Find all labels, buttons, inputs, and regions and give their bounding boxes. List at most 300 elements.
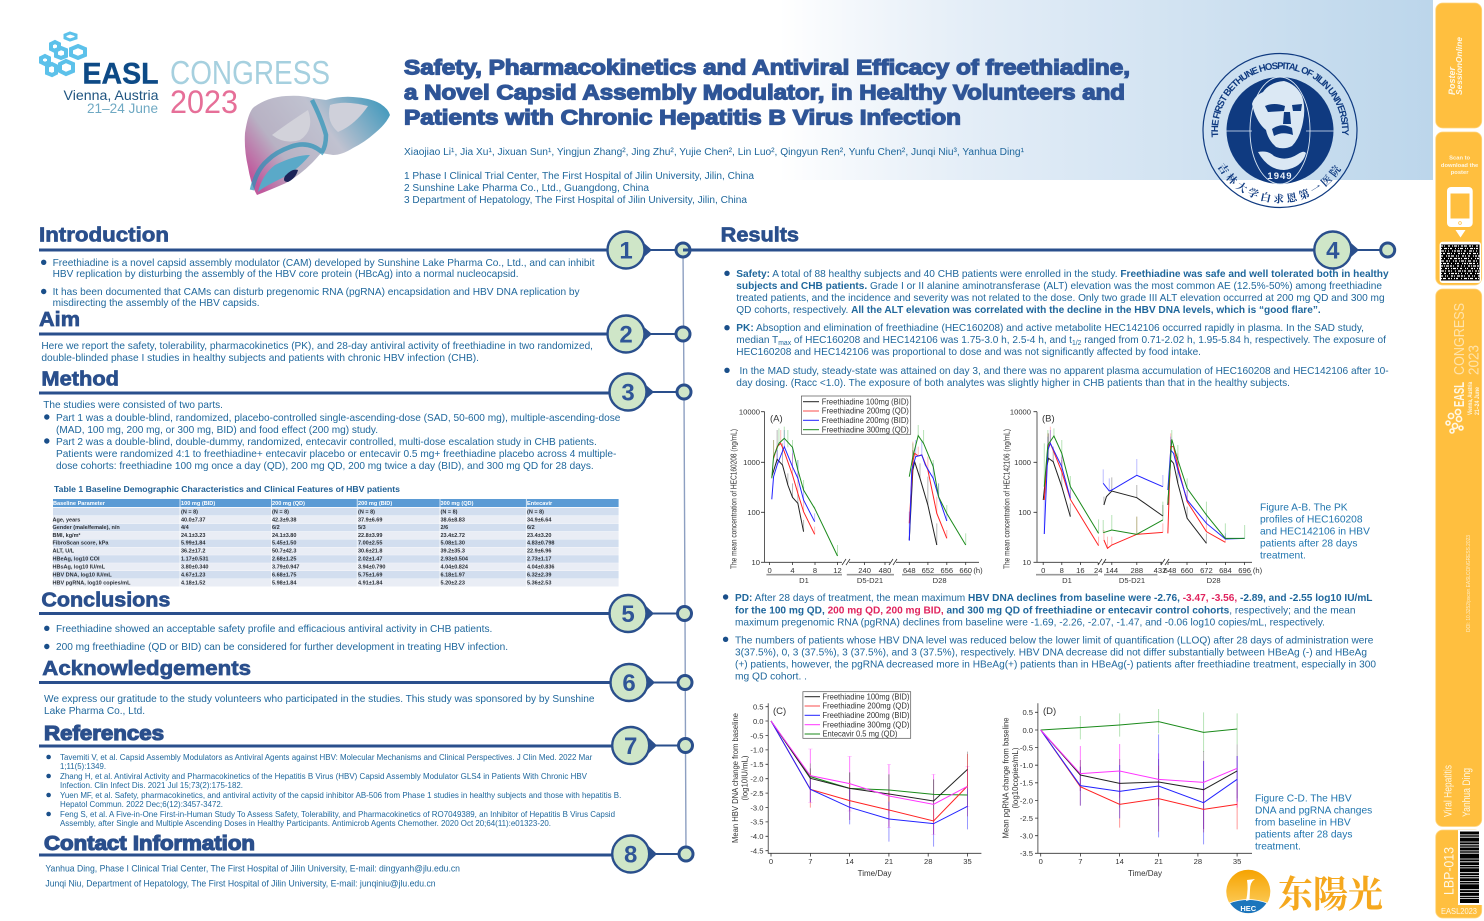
axis labels D: 0.0 <box>1022 726 1033 735</box>
axis labels C: -4.0 <box>750 832 764 841</box>
axis labels C: 21 <box>885 857 893 866</box>
table rows: 6.68±1.75 <box>272 573 296 579</box>
axis labels B: (h) <box>1253 566 1263 575</box>
chart C: HBV DNA change <box>731 692 981 878</box>
table title: Table 1 Baseline Demographic Characteristics and Clinical Features of HBV patients <box>54 485 401 494</box>
table rows: 22.8±3.99 <box>358 533 382 539</box>
axis labels D: -2.0 <box>1020 796 1033 805</box>
text: pharmacokinetics: HEC160208 and HEC142106 was proportional to dose and was not significantly affected by food intake. <box>736 347 1201 358</box>
badge 4: 4 <box>1326 238 1340 264</box>
text: acknowledgements <box>44 694 595 717</box>
axis labels A: 4 <box>790 566 795 575</box>
table rows: 6.18±1.97 <box>440 573 465 579</box>
axis labels A: D1 <box>799 576 809 585</box>
badge 3: 3 <box>621 380 635 406</box>
heading: introduction: Introduction <box>39 225 169 247</box>
table rows: 5.98±1.84 <box>272 581 297 587</box>
table rows: 2.73±1.17 <box>527 557 551 563</box>
table rows: 42.3±9.38 <box>272 517 296 523</box>
text: safety: treated patients, and the incidence and severity was not related to the dose. Only two grade III ALT elevation occurred at 200 mg QD and 300 mg <box>736 293 1385 304</box>
table rows: Gender (male/female), n/n <box>52 525 120 531</box>
text: LLOQ: mg QD cohort. . <box>735 672 807 682</box>
badge 6 <box>610 664 692 701</box>
axis labels B: 432 <box>1154 566 1166 575</box>
side logo: EASL Congress: EASL <box>1452 382 1468 407</box>
table header: 300 mg (QD) <box>440 501 474 507</box>
QR code <box>1440 242 1481 283</box>
scan instruction: Scan to <box>1449 156 1471 162</box>
text: conclusions: Freethiadine showed an acceptable safety profile and efficacious antiviral activity in CHB patients. <box>56 624 492 635</box>
badge 7: 7 <box>624 733 637 760</box>
CONGRESS wordmark: CONGRESS <box>170 54 330 91</box>
chart A: HEC160208 concentration <box>730 396 983 585</box>
table rows: 5.99±1.84 <box>181 541 206 547</box>
icon: phone <box>1447 187 1473 227</box>
axis labels C: -2.5 <box>750 789 764 798</box>
legend A: Freethiadine 200mg (BID) <box>822 416 909 425</box>
text: pharmacokinetics: of HEC160208 and HEC142106 was 1.75-3.0 h, 2.5-4 h, and t <box>791 335 1072 346</box>
axis labels A: 8 <box>813 566 817 575</box>
table rows: 6/2 <box>527 525 535 531</box>
table rows: 4.18±1.52 <box>181 581 205 587</box>
axis labels D: 0 <box>1039 857 1043 866</box>
barcode <box>1458 830 1484 905</box>
axis labels B: 648 <box>1164 566 1176 575</box>
table header <box>53 501 553 507</box>
legend A: Freethiadine 300mg (QD) <box>822 425 909 434</box>
caption: figure A-B: treatment. <box>1260 550 1306 562</box>
table header: Baseline Parameter <box>53 501 106 507</box>
location: Vienna, Austria <box>64 87 159 103</box>
badge 5: 5 <box>621 601 635 628</box>
text: safety: subjects and CHB patients. Grade I or II alanine aminotransferase (ALT) elevation was the most common AE (12.5%-50%) among freethiadine <box>736 281 1382 292</box>
legend A: Freethiadine 200mg (QD) <box>822 407 909 416</box>
timeline connector <box>683 250 686 853</box>
table header: Entecavir <box>527 501 553 507</box>
axis labels D: (D) <box>1043 706 1056 717</box>
legend C: Freethiadine 200mg (QD) <box>822 702 910 711</box>
axis labels B: (B) <box>1042 414 1055 424</box>
text: aim: double-blinded phase I studies in healthy subjects and patients with chronic HBV infection (CHB). <box>41 353 479 364</box>
poster id: LBP-013 <box>1440 847 1456 895</box>
table rows: 2.02±1.47 <box>358 557 382 563</box>
badge 2 <box>608 316 690 352</box>
legend A <box>801 396 911 434</box>
panel: introduction <box>39 225 690 309</box>
badge 6: 6 <box>622 670 636 697</box>
axis labels A: 652 <box>922 566 934 575</box>
table rows: 50.7±42.3 <box>272 549 296 555</box>
table rows: 38.6±8.83 <box>440 517 465 523</box>
axis labels B: D28 <box>1207 576 1221 585</box>
text: pharmacokinetics: max <box>778 340 792 347</box>
caption: figure C-D: treatment. <box>1255 842 1301 852</box>
side panel: congress branding <box>1436 289 1482 826</box>
axis labels C: 0.5 <box>753 702 764 712</box>
axis labels A: 10 <box>752 558 760 567</box>
table rows: (N = 8) <box>358 510 375 516</box>
header gradient band <box>780 0 1433 180</box>
title: Patients with Chronic Hepatitis B Virus Infection <box>404 106 961 130</box>
axis labels B: 696 <box>1238 566 1251 575</box>
side panel: poster id <box>1436 830 1484 918</box>
axis labels B: 672 <box>1200 566 1213 575</box>
axis labels D <box>1002 706 1241 878</box>
table rows: 37.9±6.69 <box>358 517 382 523</box>
axis labels B: 10 <box>1023 558 1031 567</box>
caption: figure A-B: Figure A-B. The PK <box>1260 502 1348 514</box>
table rows: 4.04±0.824 <box>440 564 469 570</box>
side text: poster session: SessionOnline <box>1454 37 1464 95</box>
HEC logo <box>1226 864 1383 918</box>
axis labels B: 24 <box>1094 566 1102 575</box>
caption: figure A-B: patients after 28 days <box>1260 538 1357 550</box>
table rows: 2.68±1.25 <box>272 557 296 563</box>
axis labels C <box>731 702 972 878</box>
table rows: 4/4 <box>181 525 190 531</box>
error bars and curves B <box>1043 427 1245 548</box>
side logo: EASL Congress <box>1446 303 1482 433</box>
table rows: 5.36±2.53 <box>527 581 551 587</box>
legend C: Freethiadine 100mg (BID) <box>822 692 910 701</box>
topic: Viral Hepatitis <box>1442 765 1454 817</box>
axis labels C: 14 <box>845 857 854 866</box>
text: contact details <box>45 864 460 888</box>
heading: results: Results <box>721 225 799 247</box>
side logo: EASL Congress: Vienna, Austria <box>1468 382 1474 415</box>
text: pharmacokinetics: PK: Absoption and elimination of freethiadine (HEC160208) and active metabolite HEC142106 occurred rapidly in plasma. In the SAD study, <box>736 323 1364 334</box>
badge 4 <box>1314 232 1395 268</box>
scan instruction: download the <box>1441 163 1479 169</box>
affiliations <box>404 171 754 206</box>
axis labels B: 660 <box>1181 566 1193 575</box>
table rows: 5.20±2.23 <box>440 581 465 587</box>
axis labels A: 12 <box>833 566 842 575</box>
text: introduction bullets: It has been documented that CAMs can disturb pregenomic RNA (pgRNA) encapsidation and HBV DNA replication by <box>53 287 580 298</box>
axis labels A: 240 <box>858 566 871 575</box>
text: safety <box>724 269 1389 316</box>
text: reference list: Yuen MF, et al. Safety, pharmacokinetics, and antiviral activity of the capsid inhibitor AB-506 from Phase 1 studies in healthy subjects and those with hepatitis B. <box>60 790 621 800</box>
badge 3 <box>610 374 691 410</box>
table rows: 4.91±1.84 <box>358 581 383 587</box>
axes B <box>1034 412 1252 565</box>
text: method: Part 2 was a double-blind, double-dummy, randomized, entecavir controlled, multi-dose escalation study in CHB patients. <box>56 437 597 448</box>
badge 5 <box>610 595 692 632</box>
caption: figure C-D: patients after 28 days <box>1255 830 1352 840</box>
text: reference list: 1;11(5):1349. <box>60 761 106 771</box>
side panel: scan to download <box>1436 132 1482 285</box>
badge 7 <box>612 727 692 764</box>
axis labels D: -3.5 <box>1020 849 1033 858</box>
side text: poster session <box>1447 37 1464 95</box>
axis labels D: -1.0 <box>1020 761 1033 770</box>
table rows: 5/3 <box>358 525 366 531</box>
side logo: EASL Congress: CONGRESS <box>1452 303 1468 375</box>
panel: acknowledgements <box>39 658 692 717</box>
text: aim <box>41 341 593 364</box>
EASL wordmark: EASL <box>82 58 158 90</box>
text: method <box>43 400 621 472</box>
title: a Novel Capsid Assembly Modulator, in Healthy Volunteers and <box>404 82 1125 104</box>
dates: 21–24 June <box>87 100 158 116</box>
axes D <box>1035 703 1252 856</box>
table rows: 24.1±3.23 <box>181 533 205 539</box>
text: pharmacodynamics: PD: After 28 days of treatment, the mean maximum HBV DNA declines from baseline were -2.76, -3.47, -3.56, -2.89, and -2.55 log10 IU/mL <box>735 593 1373 604</box>
table rows: 1.17±0.531 <box>181 557 208 563</box>
axis labels D: 14 <box>1115 857 1124 866</box>
axis labels C: Time/Day <box>858 869 892 878</box>
DOI text: DOI: 10.3252/pscon.EASLCONGRESS.2023 <box>1466 535 1472 632</box>
text: LLOQ: 3(37.5%), 0, 3 (37.5%), 3 (37.5%), and 3 (37.5%), respectively. HBV DNA decrease did not differ substantially between HBeAg (-) and HBeAg <box>735 648 1367 658</box>
panel: results <box>683 225 1395 682</box>
text: reference list: Zhang H, et al. Antiviral Activity and Pharmacokinetics of the Hepatitis B Virus (HBV) Capsid Assembly Modulator GLS4 in Patients With Chronic HBV <box>60 771 587 781</box>
axis labels D: Time/Day <box>1128 869 1162 878</box>
table rows: 34.9±6.64 <box>527 517 552 523</box>
axis labels D: 21 <box>1154 857 1163 866</box>
error bars and curves D <box>1041 709 1237 844</box>
caption: figure C-D: DNA and pgRNA changes <box>1255 806 1372 816</box>
axis labels D: -3.0 <box>1020 832 1033 840</box>
text: pharmacodynamics: for the 100 mg QD, 200 mg QD, 200 mg BID, and 300 mg QD of freethiadine or entecavir control cohorts, respectively; and the mean <box>735 606 1356 616</box>
axis labels A: 480 <box>879 566 891 575</box>
text: conclusions <box>44 624 508 653</box>
side panel: poster session online <box>1436 3 1482 128</box>
text: acknowledgements: We express our gratitude to the study volunteers who participated in the studies. This study was sponsored by by Sunshine <box>44 694 595 705</box>
text: LLOQ: The numbers of patients whose HBV DNA level was reduced below the lower limit of quantification (LLOQ) after 28 days of administration were <box>735 636 1374 646</box>
table rows: ALT, U/L <box>52 549 75 555</box>
table rows: BMI, kg/m² <box>52 532 80 539</box>
affiliations: 3 Department of Hepatology, The First Hospital of Jilin University, Jilin, China <box>404 195 747 206</box>
table rows: (N = 8) <box>181 510 198 516</box>
portrait <box>1252 81 1304 148</box>
legend C: Freethiadine 300mg (QD) <box>822 720 910 729</box>
axis labels C: (log10IU/mL) <box>740 755 750 800</box>
caption: figure C-D: from baseline in HBV <box>1255 818 1351 828</box>
table rows: HBV DNA, log10 IU/mL <box>52 573 112 579</box>
authors: Xiaojiao Li¹, Jia Xu¹, Jixuan Sun¹, Yingjun Zhang², Jing Zhu², Yujie Chen², Lin Luo², Qingyun Ren², Yunfu Chen², Junqi Niu³, Yanhua Ding¹ <box>404 147 1025 158</box>
table rows: (N = 8) <box>440 510 458 516</box>
table header: 200 mg (QD) <box>272 501 305 507</box>
axis labels A <box>730 408 983 585</box>
table rows: 24.1±3.80 <box>272 533 296 539</box>
axis labels C: Mean HBV DNA change from baseline <box>731 712 740 843</box>
panel: method <box>39 369 691 472</box>
side logo: EASL Congress: 2023 <box>1466 345 1482 375</box>
badge 8 <box>612 836 693 872</box>
side text: poster session: Poster <box>1447 66 1457 95</box>
legend A: Freethiadine 100mg (BID) <box>822 397 909 406</box>
error bars and curves A <box>772 425 966 556</box>
panel: conclusions <box>39 590 692 653</box>
text: pharmacokinetics: 1/2 <box>1072 340 1082 347</box>
axis labels B: D1 <box>1062 576 1072 585</box>
scan instruction <box>1441 156 1479 176</box>
text: introduction bullets: misdirecting the assembly of the HBV capsids. <box>53 298 260 309</box>
icon: sun emblem <box>1226 870 1270 914</box>
seal text: hospital name: THE FIRST BETHUNE HOSPITAL OF JILIN UNIVERSITY <box>1211 62 1349 138</box>
table rows: 23.4±3.20 <box>527 533 551 539</box>
axis labels B: 144 <box>1105 566 1118 575</box>
text: introduction bullets <box>41 258 595 309</box>
chart B: HEC142106 concentration <box>1002 408 1263 585</box>
axis labels C: 0 <box>769 857 773 866</box>
text: reference list <box>46 752 621 828</box>
axis labels D: 0.5 <box>1022 708 1033 717</box>
title: Safety, Pharmacokinetics and Antiviral Efficacy of freethiadine, <box>404 56 1130 80</box>
legend C: Freethiadine 200mg (BID) <box>822 711 910 720</box>
table rows: Age, years <box>52 517 80 523</box>
axis labels C: -2.0 <box>750 774 764 784</box>
axis labels B: 0 <box>1041 566 1045 575</box>
table rows: 23.4±2.72 <box>440 533 465 539</box>
text: MAD study: In the MAD study, steady-state was attained on day 3, and there was no apparent plasma accumulation of HEC160208 and HEC142106 after 10- <box>740 366 1389 377</box>
table rows: FibroScan score, kPa <box>52 541 109 547</box>
axis labels A: 100 <box>747 508 760 517</box>
text: reference list: Hepatol Commun. 2022 Dec;6(12):3457-3472. <box>60 799 223 809</box>
text: method: dose cohorts: freethiadine 100 mg once a day (QD), 200 mg QD, 200 mg twice a day (BID), and 300 mg QD for 28 days. <box>56 461 594 472</box>
error bars and curves C <box>771 721 967 847</box>
text: pharmacodynamics: maximum pregenomic RNA (pgRNA) declines from baseline were -1.69, -2.26, -2.07, -1.47, and -0.06 log10 copies/mL, respectively. <box>735 618 1325 628</box>
table rows: 2.93±0.504 <box>440 557 469 563</box>
table rows: (N = 8) <box>272 510 289 516</box>
badge 1 <box>608 232 690 268</box>
congress tag: EASL2023 <box>1441 906 1477 916</box>
EASL Congress logo <box>41 33 330 120</box>
panel: contact information <box>39 833 693 888</box>
text: safety: Safety: A total of 88 healthy subjects and 40 CHB patients were enrolled in the study. Freethiadine was safe and well tolerated both in healthy <box>736 269 1389 280</box>
text: introduction bullets: Freethiadine is a novel capsid assembly modulator (CAM) developed by Sunshine Lake Pharma Co., Ltd., and can inhibit <box>53 258 595 269</box>
axis labels A: (h) <box>973 566 983 575</box>
text: method: Part 1 was a double-blind, randomized, placebo-controlled single-ascending-dose (SAD, 50-600 mg), multiple-ascending-dose <box>56 413 621 424</box>
axis labels A: 0 <box>767 566 772 575</box>
seal year: 1949 <box>1267 171 1293 182</box>
text: contact details: Yanhua Ding, Phase I Clinical Trial Center, The First Hospital of Jilin University, E-mail: dingyanh@jlu.edu.cn <box>45 864 460 874</box>
axis labels C: -0.5 <box>750 731 764 740</box>
scan instruction: poster <box>1451 170 1469 176</box>
table 1: baseline characteristics <box>52 485 619 587</box>
axis labels C: (C) <box>773 706 786 717</box>
axis labels C: -1.0 <box>750 746 764 755</box>
caption: figure C-D <box>1255 794 1372 852</box>
axis labels A: 656 <box>940 566 953 575</box>
table rows: 22.9±6.96 <box>527 549 551 555</box>
axis labels B: 8 <box>1060 566 1064 575</box>
text: contact details: Junqi Niu, Department of Hepatology, The First Hospital of Jilin University, E-mail: junqiniu@jlu.edu.cn <box>45 878 436 888</box>
caption: figure C-D: Figure C-D. The HBV <box>1255 794 1352 804</box>
axes C <box>766 703 981 856</box>
table rows: 7.00±2.55 <box>358 541 382 547</box>
panel: aim <box>39 309 690 364</box>
axis labels C: -1.5 <box>750 760 764 769</box>
affiliations: 2 Sunshine Lake Pharma Co., Ltd., Guangdong, China <box>404 183 649 194</box>
axes A <box>761 412 979 565</box>
axis labels D: -2.5 <box>1020 814 1033 823</box>
table rows: 5.45±1.50 <box>272 541 296 547</box>
table rows: 3.80±0.340 <box>181 564 208 570</box>
heading: aim: Aim <box>39 309 80 331</box>
seal text: chinese name: 吉林大学白求恩第一医院 <box>1218 163 1342 204</box>
table rows: 36.2±17.2 <box>181 549 205 555</box>
heading: acknowledgements: Acknowledgements <box>42 658 251 680</box>
text: reference list: Assembly, after Single and Multiple Ascending Doses in Healthy Participants. Antimicrob Agents Chemother. 2020 Oct 20;64(11):e01323-20. <box>60 818 551 828</box>
table rows: 3.94±0.790 <box>358 564 386 570</box>
affiliations: 1 Phase I Clinical Trial Center, The First Hospital of Jilin University, Jilin, China <box>404 171 754 182</box>
text: reference list: Tavemiti V, et al. Capsid Assembly Modulators as Antiviral Agents against HBV: Molecular Mechanisms and Clinical Perspectives. J Clin Med. 2022 Mar <box>60 752 592 762</box>
axis labels D: Mean pgRNA change from baseline <box>1002 717 1010 838</box>
table rows: 30.6±21.8 <box>358 549 382 555</box>
badge 8: 8 <box>624 842 637 868</box>
heading: references: References <box>44 723 164 745</box>
axis labels B: 288 <box>1130 566 1143 575</box>
text: method: The studies were consisted of two parts. <box>43 400 223 411</box>
axis labels A: D5-D21 <box>857 576 883 585</box>
text: acknowledgements: Lake Pharma Co., Ltd. <box>44 706 145 717</box>
axis labels B: D5-D21 <box>1119 576 1145 585</box>
axis labels D: 35 <box>1233 857 1241 866</box>
table rows: 6.32±2.39 <box>527 573 551 579</box>
brand name: 东陽光 <box>1278 864 1383 918</box>
axis labels D: 28 <box>1194 857 1202 866</box>
table rows: HBV pgRNA, log10 copies/mL <box>52 581 131 587</box>
icon: sun emblem: HEC <box>1240 904 1257 913</box>
presenter: Yanhua Ding <box>1461 768 1473 817</box>
axis labels C: -3.5 <box>750 818 764 827</box>
table rows: 2/6 <box>440 525 448 531</box>
axis labels C: -3.0 <box>750 803 764 812</box>
axis labels A: D28 <box>933 576 947 585</box>
table rows: 4.83±0.798 <box>527 541 554 547</box>
axis labels A: 648 <box>903 566 916 575</box>
table rows: 5.75±1.69 <box>358 573 382 579</box>
table rows: 4.67±1.23 <box>181 573 205 579</box>
axis labels C: 35 <box>963 857 972 866</box>
text: pharmacodynamics <box>723 593 1373 628</box>
axis labels C: 7 <box>808 857 813 866</box>
text: aim: Here we report the safety, tolerability, pharmacokinetics (PK), and 28-day antiviral activity of freethiadine in two randomized, <box>41 341 593 352</box>
text: reference list: Infection. Clin Infect Dis. 2021 Jul 15;73(2):175-182. <box>60 780 243 790</box>
text: MAD study: day dosing. (Racc <1.0). The exposure of both analytes was slightly higher in CHB patients than that in the healthy subjects. <box>736 378 1290 389</box>
caption: figure A-B: and HEC142106 in HBV <box>1260 526 1370 538</box>
legend C: Entecavir 0.5 mg (QD) <box>822 730 898 739</box>
table rows: 6/2 <box>272 525 280 531</box>
text: pharmacokinetics: ranged from 0.71-2.02 h, 1.95-5.84 h, respectively. The exposure of <box>1081 335 1386 346</box>
text: LLOQ <box>723 636 1376 682</box>
axis labels A: 1000 <box>743 458 760 467</box>
table rows: HBeAg, log10 COI <box>52 557 100 563</box>
table rows: 40.0±7.37 <box>181 517 205 523</box>
table rows: 39.2±35.3 <box>440 549 465 555</box>
title <box>404 56 1130 130</box>
text: pharmacokinetics: median T <box>736 335 779 346</box>
axis labels D: -1.5 <box>1020 779 1033 788</box>
axis labels C: -4.5 <box>750 846 764 856</box>
text: pharmacokinetics <box>724 323 1386 358</box>
axis labels D: 7 <box>1078 857 1083 866</box>
text: MAD study <box>724 366 1389 389</box>
badge 2: 2 <box>619 322 633 348</box>
heading: conclusions: Conclusions <box>41 590 170 612</box>
text: safety: QD cohorts, respectively. All the ALT elevation was correlated with the decline in the HBV DNA levels, which is “good flare”. <box>736 305 1321 316</box>
table rows: HBsAg, log10 IU/mL <box>52 564 106 570</box>
table rows: 3.79±0.947 <box>272 564 300 570</box>
axis labels B: 16 <box>1076 566 1085 575</box>
axis labels B: 100 <box>1018 508 1031 517</box>
axis labels B: The mean concentration of HEC142106 (ng/mL) <box>1002 429 1012 569</box>
axis labels C: 28 <box>924 857 932 866</box>
chart D: pgRNA change <box>1002 703 1252 878</box>
table header: 200 mg (BID) <box>358 501 392 507</box>
axis labels C: 0.0 <box>753 717 764 726</box>
